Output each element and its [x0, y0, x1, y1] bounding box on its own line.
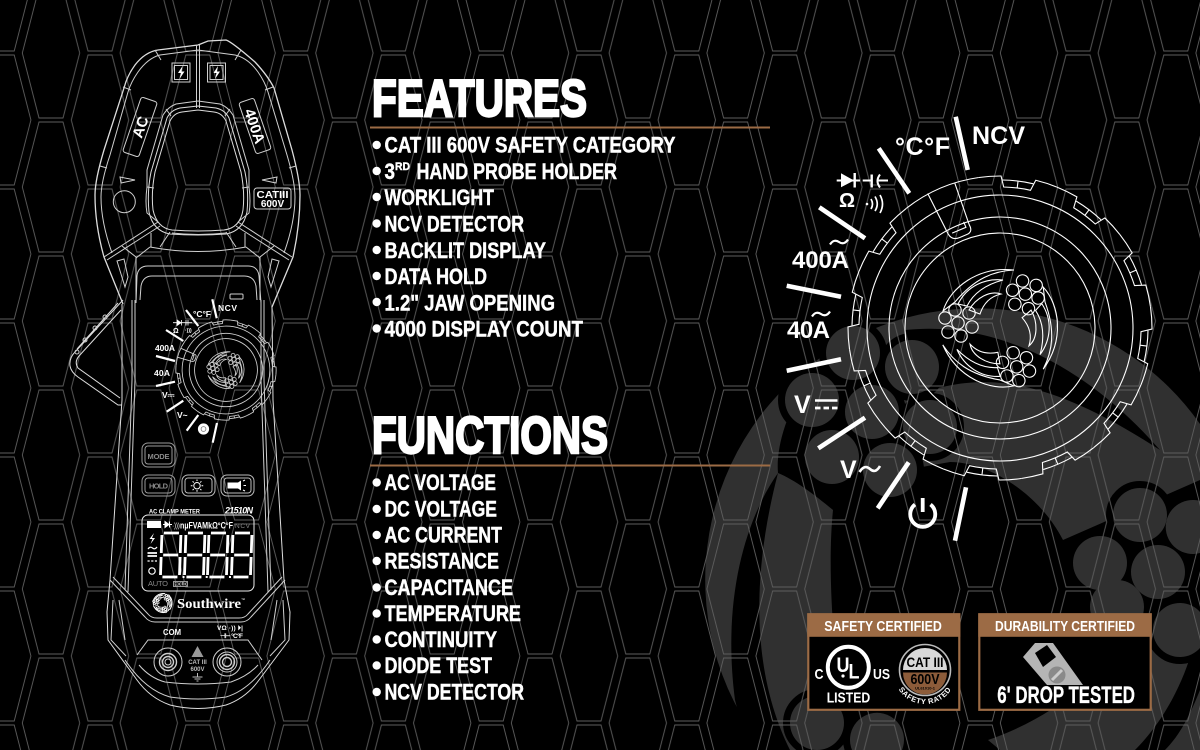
lightning box right	[208, 63, 226, 82]
heading: features: FEATURES	[372, 70, 587, 128]
functions list: NCV DETECTOR	[384, 680, 524, 704]
functions divider	[370, 464, 770, 466]
drop tested caption: 6' DROP TESTED	[997, 682, 1135, 709]
dial label: AC volts: V	[840, 456, 857, 484]
CAT III 600V seal: UL61010-1	[915, 686, 936, 690]
hold button: HOLD	[149, 482, 169, 490]
dial ticks	[787, 117, 968, 541]
functions list: CONTINUITY	[384, 627, 497, 652]
socket labels: COM	[163, 627, 181, 637]
CAT III 600V seal: CAT III	[906, 654, 944, 670]
socket warning and CAT III mark	[188, 646, 207, 681]
HOLD indicator: HOLD	[174, 582, 187, 588]
LCD top indicators	[147, 520, 251, 530]
CAT III jaw label	[254, 188, 291, 210]
mode button: MODE	[148, 452, 170, 461]
UL listed mark: LISTED	[827, 690, 870, 707]
Southwire logo	[153, 593, 245, 616]
dial label: DC volts	[794, 391, 838, 419]
clamp meter line drawing	[70, 40, 300, 708]
socket warning and CAT III mark: CAT III	[188, 660, 207, 666]
jaw inner lines	[101, 45, 295, 253]
LCD digits	[160, 533, 252, 578]
features list: DATA HOLD	[384, 264, 487, 289]
jaw triangle marks and lamp	[120, 177, 277, 183]
safety title: SAFETY CERTIFIED	[824, 619, 942, 635]
meter dial labels: V~	[177, 410, 188, 420]
400A jaw label: 400A	[240, 107, 268, 146]
features divider	[370, 126, 770, 128]
dial label: DC volts: V	[794, 391, 811, 419]
COM socket	[154, 648, 182, 676]
CAT III 600V seal: SAFETY RATED	[899, 687, 950, 704]
safety header	[807, 613, 960, 637]
meter dial labels: ·)))	[185, 328, 192, 334]
CAT III jaw label: CATIII	[256, 189, 289, 201]
features list: BACKLIT DISPLAY	[384, 238, 546, 263]
functions list: AC CURRENT	[384, 522, 502, 548]
functions list: DC VOLTAGE	[384, 496, 497, 522]
meter dial labels: Ω	[173, 328, 179, 335]
body outline	[107, 304, 290, 708]
LCD side indicators	[148, 533, 157, 574]
dial label: temperature: °C°F	[895, 133, 950, 161]
socket labels: ⊣⊢ °C°F	[220, 632, 243, 640]
jaw shoulders and right rails	[198, 50, 296, 656]
meter dial labels: V⎓	[162, 390, 176, 400]
backlight button	[182, 475, 215, 496]
durability title: DURABILITY CERTIFIED	[995, 619, 1135, 635]
meter model labels: AC CLAMP METER	[149, 508, 200, 515]
small display slot	[230, 294, 243, 299]
functions list: AC VOLTAGE	[384, 470, 496, 495]
durability header	[978, 613, 1152, 637]
V socket	[213, 648, 241, 676]
400A jaw label	[237, 98, 271, 155]
badge: safety certified	[807, 613, 960, 711]
meter dial labels: 40A	[154, 368, 170, 378]
body top edge	[136, 266, 261, 303]
LCD top indicators: ·)))	[172, 523, 180, 530]
functions list: TEMPERATURE	[384, 601, 521, 626]
meter dial small icons	[173, 320, 192, 326]
jaw outline	[95, 40, 300, 307]
LCD top indicators: nµFVAMkΩ°C°F	[180, 520, 233, 530]
features list: 4000 DISPLAY COUNT	[384, 317, 583, 342]
grip trigger	[70, 300, 123, 405]
shoulder curve	[150, 233, 246, 252]
features list: 3	[384, 159, 395, 184]
CAT III jaw label: 600V	[261, 199, 285, 210]
socket labels	[163, 625, 243, 640]
dial centre logo	[939, 268, 1079, 407]
CAT III 600V seal	[898, 644, 952, 704]
AC jaw label	[123, 97, 158, 158]
features list: 1.2" JAW OPENING	[384, 291, 555, 316]
features list: RD	[395, 161, 410, 173]
lower body chevrons	[110, 577, 285, 622]
LCD top indicators: NCV	[235, 523, 251, 530]
functions list	[372, 470, 524, 704]
dial label: diode, capacitance, resistance, continuity	[837, 173, 888, 213]
heading: functions: FUNCTIONS	[372, 407, 608, 465]
UL listed mark: L	[848, 660, 860, 684]
Southwire logo: Southwire	[177, 596, 241, 611]
meter power icon	[198, 423, 209, 435]
meter dial labels: °C°F	[193, 309, 211, 319]
AUTO indicator: AUTO	[148, 579, 168, 588]
worklight button	[221, 475, 254, 496]
CAT III 600V seal: 600V	[910, 671, 940, 688]
features list: HAND PROBE HOLDER	[416, 159, 617, 184]
meter dial labels: 400A	[155, 343, 175, 353]
features list	[372, 133, 676, 342]
AC jaw label: AC	[129, 114, 153, 140]
icon: dropped meter	[1023, 643, 1083, 685]
dial label: 400A: 400A	[792, 247, 849, 274]
LCD display	[142, 515, 254, 591]
meter dial labels	[154, 303, 237, 420]
dial label: AC volts	[840, 456, 880, 484]
lightning box left	[172, 63, 190, 82]
dial gear	[802, 129, 1198, 526]
UL listed mark: U	[836, 654, 850, 677]
rotary dial enlarged	[802, 129, 1198, 526]
dial label: NCV: NCV	[972, 122, 1025, 150]
meter model labels: 21510N	[224, 505, 254, 515]
features list: CAT III 600V SAFETY CATEGORY	[384, 133, 676, 158]
meter dial labels: NCV	[218, 303, 237, 313]
icon: power	[910, 498, 935, 527]
badge: durability certified	[978, 613, 1152, 710]
socket warning and CAT III mark: 600V	[190, 667, 205, 673]
socket labels: VΩ ·)) ⏵|	[217, 625, 243, 632]
socket plate	[125, 640, 270, 699]
mode button	[142, 443, 175, 467]
UL listed mark: C	[814, 666, 824, 683]
meter rotary dial	[162, 306, 290, 434]
features list: NCV DETECTOR	[384, 212, 524, 237]
hold button	[142, 475, 175, 496]
features list: WORKLIGHT	[384, 185, 494, 210]
dial label: 40A: 40A	[787, 317, 830, 344]
jaw opening	[148, 106, 248, 235]
meter model labels	[149, 505, 254, 515]
meter dial ticks	[156, 299, 217, 443]
dial label: diode, capacitance, resistance, continuity: Ω	[839, 190, 855, 212]
UL listed mark: US	[873, 666, 890, 683]
functions list: RESISTANCE	[384, 549, 499, 574]
functions list: DIODE TEST	[384, 653, 492, 678]
Southwire logo: ™	[241, 597, 245, 602]
watermark swirl logo	[705, 308, 1200, 750]
jaw shoulders and left rails	[100, 50, 198, 656]
jaw lens	[113, 191, 135, 213]
UL listed mark	[814, 647, 890, 707]
functions list: CAPACITANCE	[384, 575, 513, 600]
